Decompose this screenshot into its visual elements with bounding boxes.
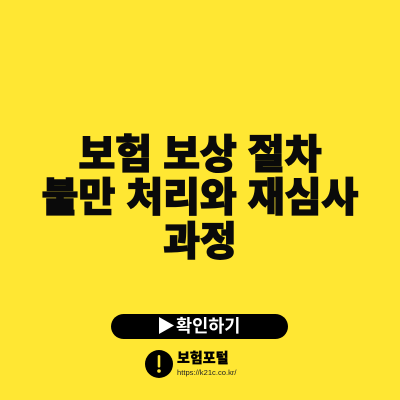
button: confirm: 확인하기 xyxy=(176,316,240,336)
logo: 보험포털 xyxy=(145,350,237,378)
title xyxy=(42,133,358,264)
logo: 보험포털: 보험포털 xyxy=(177,350,229,366)
title: 보험 보상 절차 xyxy=(78,133,322,177)
title: 불만 처리와 재심사 xyxy=(42,176,358,220)
icon: exclamation mark xyxy=(145,350,173,378)
logo: 보험포털: https://k21c.co.kr/ xyxy=(177,368,237,377)
button: confirm xyxy=(111,314,288,339)
title: 과정 xyxy=(163,220,237,264)
